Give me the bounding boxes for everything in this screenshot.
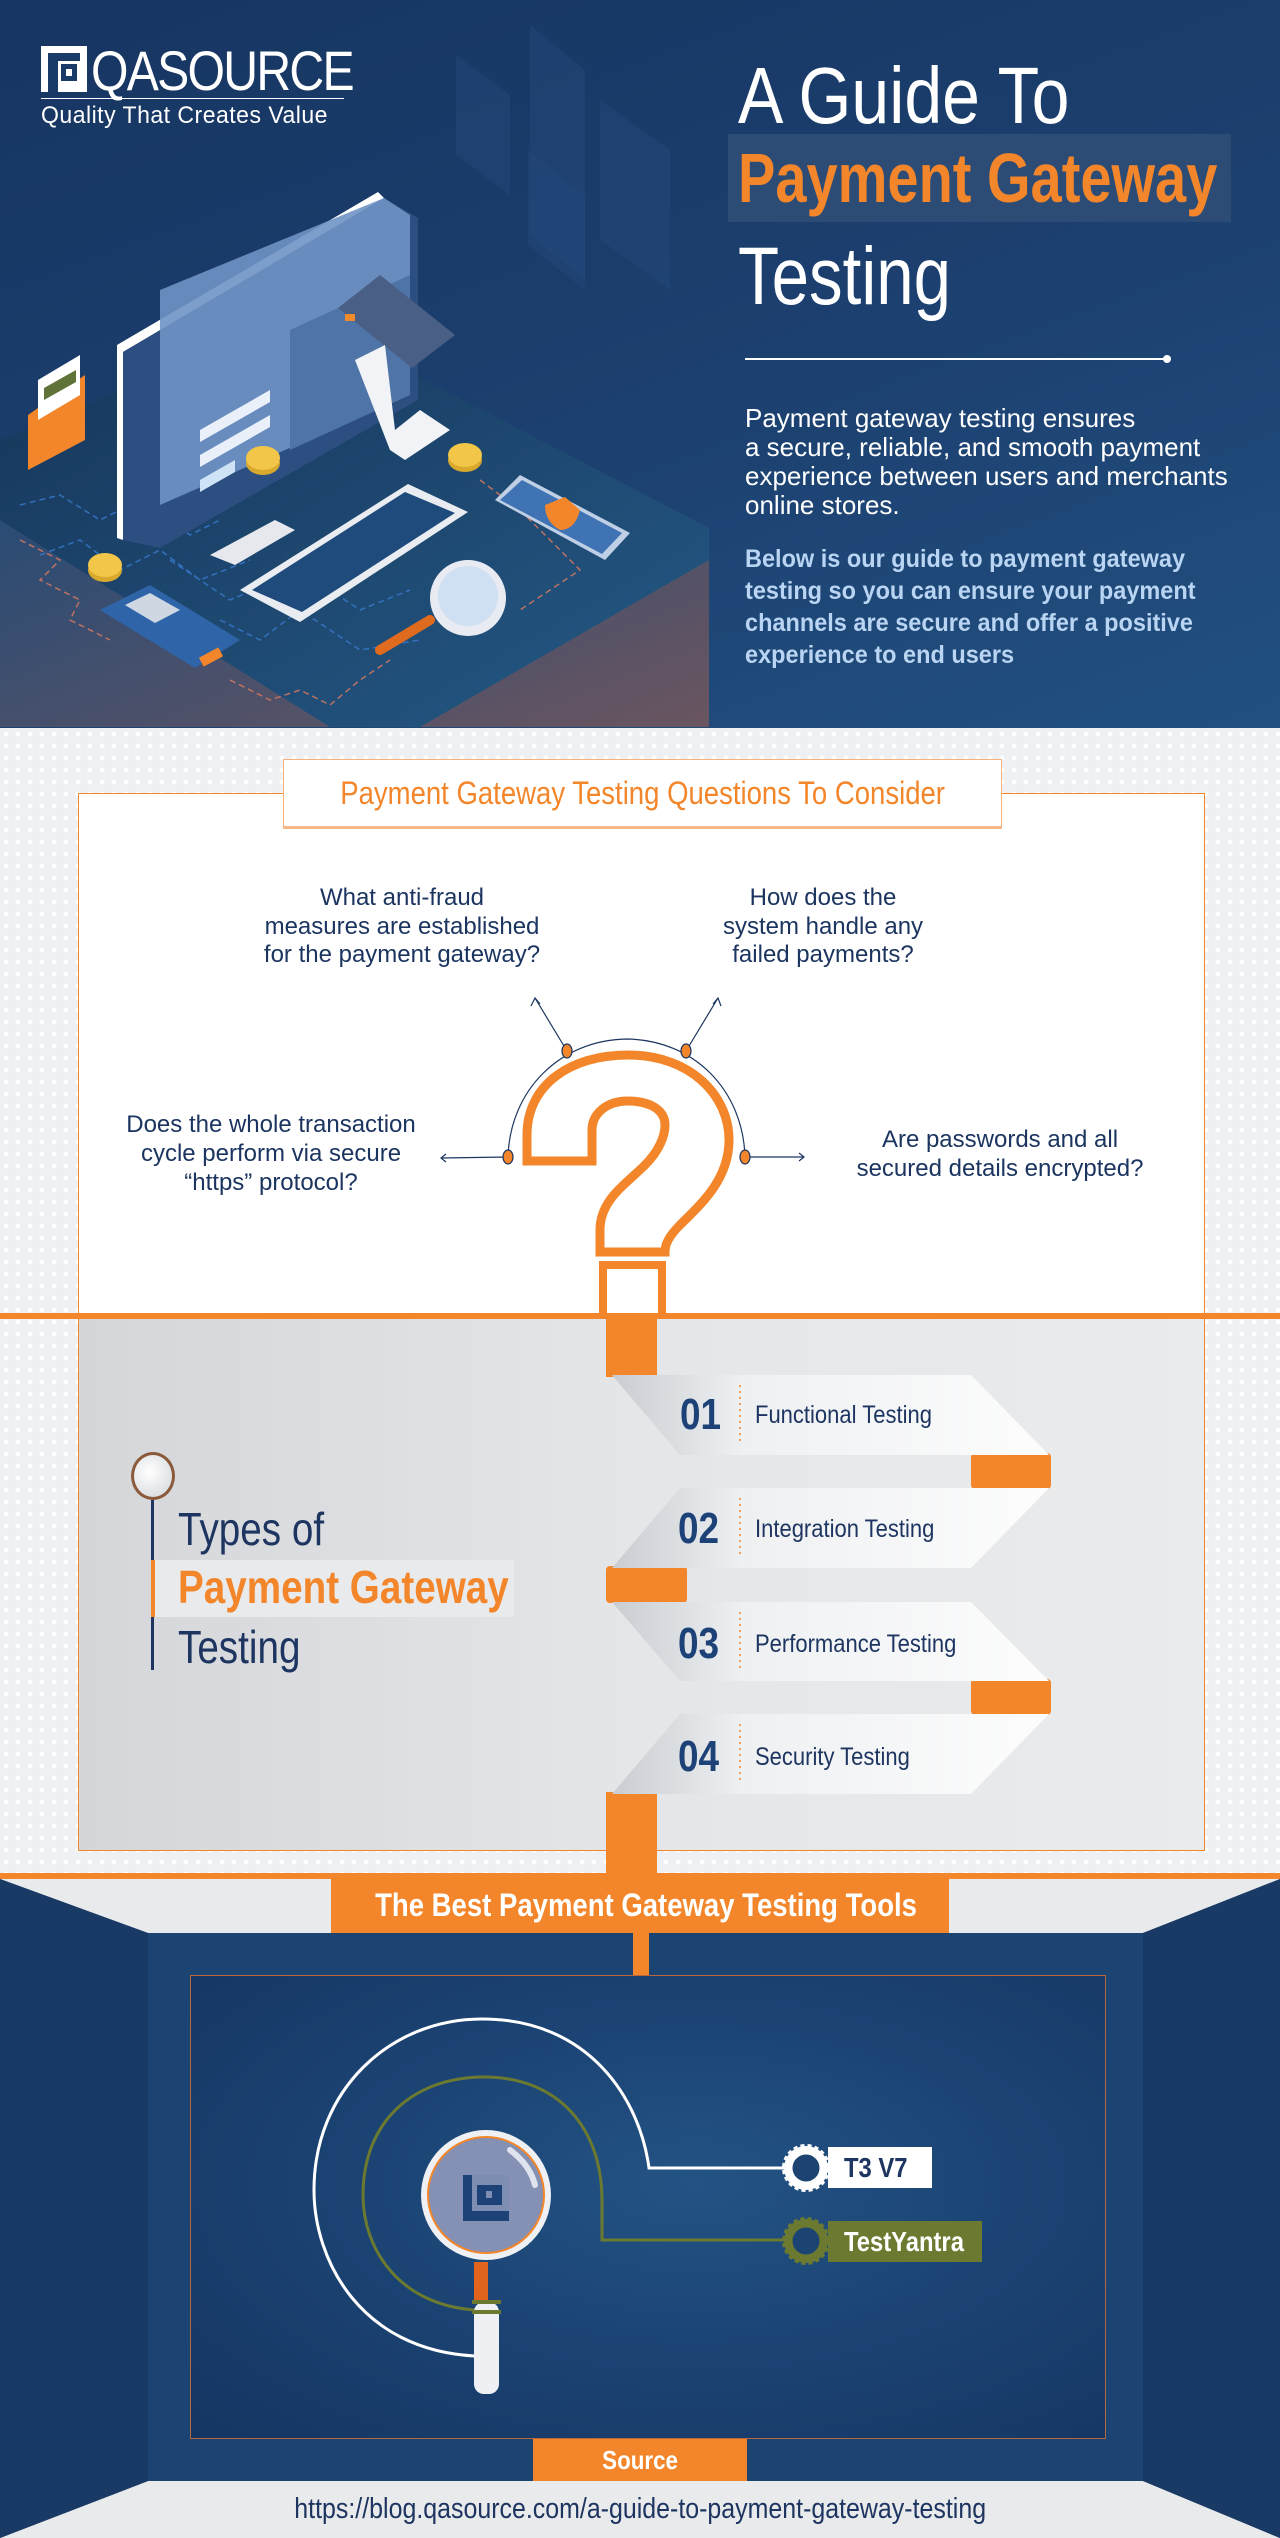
intro paragraph: online stores. <box>745 490 900 520</box>
envelope <box>28 375 85 470</box>
ribbon 03 <box>612 1602 1049 1681</box>
question mark graphic with arc and arrows <box>440 996 805 1313</box>
questions heading <box>283 759 1002 829</box>
source label: Source <box>602 2445 678 2475</box>
question 2: How does the <box>750 884 896 911</box>
question 1: measures are established <box>265 912 539 940</box>
highlighted paragraph: experience to end users <box>745 641 1014 669</box>
illustration: payment desk <box>0 192 709 727</box>
coins <box>246 451 280 475</box>
logo <box>41 39 353 129</box>
question 4: Are passwords and all <box>882 1126 1118 1153</box>
question 1: for the payment gateway? <box>264 941 540 968</box>
dashed circuit lines <box>20 495 420 650</box>
question 4 <box>857 1126 1143 1182</box>
question 3 <box>126 1111 416 1196</box>
item 03: Performance Testing <box>755 1630 956 1658</box>
questions heading: Payment Gateway Testing Questions To Consider <box>340 775 945 811</box>
magnifier lens <box>421 2130 551 2260</box>
icon: gear T3 <box>784 2146 828 2190</box>
ribbon 01 <box>612 1375 1049 1455</box>
title <box>728 51 1231 322</box>
ribbon 04 <box>612 1714 1049 1794</box>
intro paragraph: experience between users and merchants <box>745 461 1228 491</box>
types heading: Testing <box>178 1621 300 1673</box>
item 04 <box>678 1732 910 1781</box>
question 3: Does the whole transaction <box>126 1111 416 1138</box>
item 01 <box>680 1390 932 1439</box>
item 04: Security Testing <box>755 1743 910 1771</box>
questions section background <box>0 728 1280 1878</box>
logo: Quality That Creates Value <box>41 102 328 129</box>
types heading: Types of <box>178 1503 324 1555</box>
item 01: 01 <box>680 1390 721 1439</box>
highlighted paragraph: channels are secure and offer a positive <box>745 609 1193 637</box>
question 1: What anti-fraud <box>320 884 484 911</box>
types heading <box>131 1452 514 1673</box>
keyboard <box>240 484 468 622</box>
monitor <box>117 192 384 540</box>
divider with dot <box>745 358 1165 360</box>
tools heading: The Best Payment Gateway Testing Tools <box>375 1887 917 1923</box>
background decorative panels <box>456 26 624 280</box>
item 04: 04 <box>678 1732 719 1781</box>
question 2 <box>723 884 923 968</box>
orange stem connector and ribbons <box>606 1319 1051 1873</box>
icon: lens circle <box>131 1452 175 1500</box>
tool label: TestYantra: TestYantra <box>844 2226 964 2257</box>
tools section room <box>0 1873 1280 2538</box>
item 02: 02 <box>678 1504 719 1553</box>
title: Payment Gateway <box>738 139 1217 217</box>
item 03: 03 <box>678 1619 719 1668</box>
tools diagram <box>312 2018 828 2394</box>
intro paragraph: Payment gateway testing ensures <box>745 403 1135 433</box>
tools heading <box>331 1878 949 1933</box>
tool label: T3 V7 <box>828 2147 932 2188</box>
source url: https://blog.qasource.com/a-guide-to-payment-gateway-testing <box>294 2493 986 2525</box>
phone <box>495 475 630 560</box>
highlighted paragraph <box>745 545 1196 669</box>
question 2: system handle any <box>723 912 923 940</box>
ribbon 02 <box>612 1488 1049 1568</box>
logo mark <box>41 46 87 92</box>
title highlight box <box>728 134 1231 222</box>
intro paragraph <box>745 403 1228 520</box>
icon: gear TestYantra <box>784 2219 828 2263</box>
tool label: T3 V7: T3 V7 <box>844 2152 907 2183</box>
credit card & receipt <box>338 275 455 368</box>
logo: QASOURCE <box>91 39 353 102</box>
question 1 <box>264 884 540 968</box>
magnifier <box>380 620 430 650</box>
item 02 <box>678 1504 934 1553</box>
intro paragraph: a secure, reliable, and smooth payment <box>745 432 1200 462</box>
orange divider line <box>0 1313 1280 1319</box>
hero section <box>0 0 1280 728</box>
highlighted paragraph: testing so you can ensure your payment <box>745 577 1196 605</box>
item 01: Functional Testing <box>755 1401 932 1429</box>
question 2: failed payments? <box>732 941 914 968</box>
question 3: “https” protocol? <box>184 1169 358 1196</box>
source label <box>533 2439 747 2481</box>
panel: types of testing <box>78 1319 1205 1851</box>
types heading: Payment Gateway <box>178 1561 509 1613</box>
title: Testing <box>738 231 951 322</box>
panel: questions <box>78 793 1205 1315</box>
highlighted paragraph: Below is our guide to payment gateway <box>745 545 1185 573</box>
title: A Guide To <box>738 51 1069 140</box>
panel: tools <box>190 1975 1106 2439</box>
magnifier handle <box>474 2262 488 2302</box>
question 3: cycle perform via secure <box>141 1140 401 1167</box>
card terminal <box>100 585 240 668</box>
question 4: secured details encrypted? <box>857 1155 1143 1182</box>
item 02: Integration Testing <box>755 1515 934 1543</box>
tool label: TestYantra <box>828 2221 982 2262</box>
item 03 <box>678 1619 956 1668</box>
